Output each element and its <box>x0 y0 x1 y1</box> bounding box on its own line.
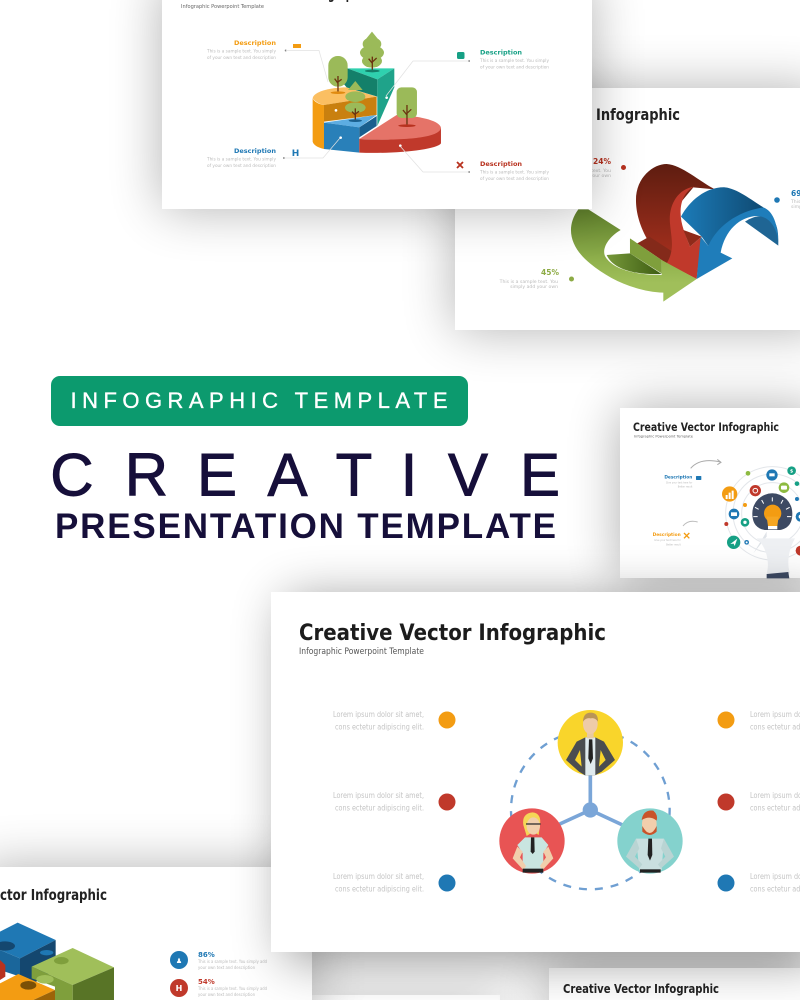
list item: left 1: Lorem ipsum dolor sit amet, <box>333 710 424 719</box>
stat row: 86%: This is a sample text. You simply add <box>197 959 267 965</box>
callout: bottom left description: H <box>292 149 299 159</box>
subheading: pie slide: Infographic Powerpoint Template <box>181 4 264 10</box>
stat: 45%: simply add your own <box>510 284 558 290</box>
callout: top left description: of your own text and description <box>207 55 276 61</box>
callout: top right description <box>386 48 549 96</box>
callout: bottom left description: of your own text and description <box>207 163 276 169</box>
stat row: 86% <box>170 951 267 971</box>
list item: left 2 <box>333 791 456 812</box>
heading: arrows slide: Infographic <box>596 105 680 124</box>
list item: right 1 <box>718 710 800 732</box>
person: red woman <box>499 808 565 874</box>
card: bottom small slide <box>312 995 500 1000</box>
callout: top left description <box>206 39 328 82</box>
callout: bottom left description: Description <box>234 147 276 155</box>
stat row: 54%: 54% <box>198 978 215 986</box>
list item: left 1: cons ectetur adipiscing elit. <box>335 722 424 732</box>
person: teal man <box>617 808 683 874</box>
stat: 45% <box>499 268 574 290</box>
bulb infographic: Better result <box>666 543 681 546</box>
banner: infographic template: INFOGRAPHIC TEMPLATE <box>70 388 448 413</box>
stat row: 54%: This is a sample text. You simply add <box>197 986 267 992</box>
stat row: 86%: 86% <box>198 951 215 959</box>
callout: top right description: of your own text and description <box>480 64 549 70</box>
person: yellow man <box>558 710 623 775</box>
callout: bottom left description <box>206 138 340 169</box>
list item: left 2: cons ectetur adipiscing elit. <box>335 804 424 812</box>
title: presentation template: PRESENTATION TEMPLATE <box>55 507 556 546</box>
stat: 24%: text. You <box>591 168 611 174</box>
callout: bottom right description: This is a sample text. You simply <box>479 170 549 176</box>
card: bulb slide: Infographic Powerpoint Template <box>634 434 694 438</box>
card: arrows slide <box>455 88 800 330</box>
bulb infographic: Give your text here for <box>666 481 692 484</box>
heading: main slide: Creative Vector Infographic <box>299 621 606 646</box>
list item: right 2 <box>718 791 800 812</box>
heading: bottom right slide: Creative Vector Infographic <box>563 981 719 996</box>
people network diagram <box>499 710 683 889</box>
stat row: 54%: your own text and description <box>198 992 255 998</box>
title: creative: CREATIVE <box>50 442 560 508</box>
stat: 45%: 45% <box>541 268 559 277</box>
card: bottom right slide <box>549 968 800 1000</box>
3D arrows graphic <box>571 164 778 302</box>
list item: left 3: cons ectetur adipiscing elit. <box>335 884 424 894</box>
stat row: 86%: ♟ <box>176 957 182 965</box>
stat: 24%: your own <box>590 173 611 179</box>
callout: bottom right description <box>400 146 549 182</box>
list item: left 2: Lorem ipsum dolor sit amet, <box>333 791 424 800</box>
bulb infographic: Description <box>653 532 681 538</box>
banner: infographic template <box>51 376 468 426</box>
puzzle graphic <box>0 923 114 1000</box>
bulb infographic: Give your text here for <box>654 539 681 542</box>
stat row: 86%: your own text and description <box>198 965 255 971</box>
card: puzzle slide <box>0 867 312 1000</box>
3D pie graphic <box>313 32 441 153</box>
callout: top left description: This is a sample text. You simply <box>206 48 276 54</box>
list item: left 1 <box>333 710 456 732</box>
callout: bottom right description: of your own text and description <box>480 176 549 182</box>
callout: top right description: Description <box>480 48 522 56</box>
stat: 69% <box>774 189 800 210</box>
list item: right 3 <box>718 872 800 894</box>
stat row: 54% <box>170 978 267 998</box>
list item: left 3 <box>333 872 456 894</box>
bulb infographic: $ <box>790 468 793 474</box>
callout: top right description: This is a sample text. You simply <box>479 58 549 64</box>
callout: top left description: Description <box>234 39 276 47</box>
callout: bottom left description: This is a sample text. You simply <box>206 156 276 162</box>
stat: 24% <box>590 157 626 179</box>
bulb infographic: Better result <box>678 486 692 489</box>
card: bulb slide <box>620 408 800 580</box>
card: main people slide <box>271 592 800 960</box>
stat: 24%: 24% <box>593 157 611 166</box>
subheading: main slide: Infographic Powerpoint Template <box>299 647 424 657</box>
trees <box>328 32 417 127</box>
heading: puzzle slide: ctor Infographic <box>0 886 107 904</box>
callout: bottom right description: Description <box>480 160 522 168</box>
stat: 45%: This is a sample text. You <box>499 279 558 285</box>
bulb infographic: Description <box>664 475 692 481</box>
card: pie chart slide <box>162 0 592 209</box>
bulb infographic <box>653 459 800 578</box>
stat row: 54%: H <box>176 984 182 993</box>
list item: left 3: Lorem ipsum dolor sit amet, <box>333 872 424 881</box>
